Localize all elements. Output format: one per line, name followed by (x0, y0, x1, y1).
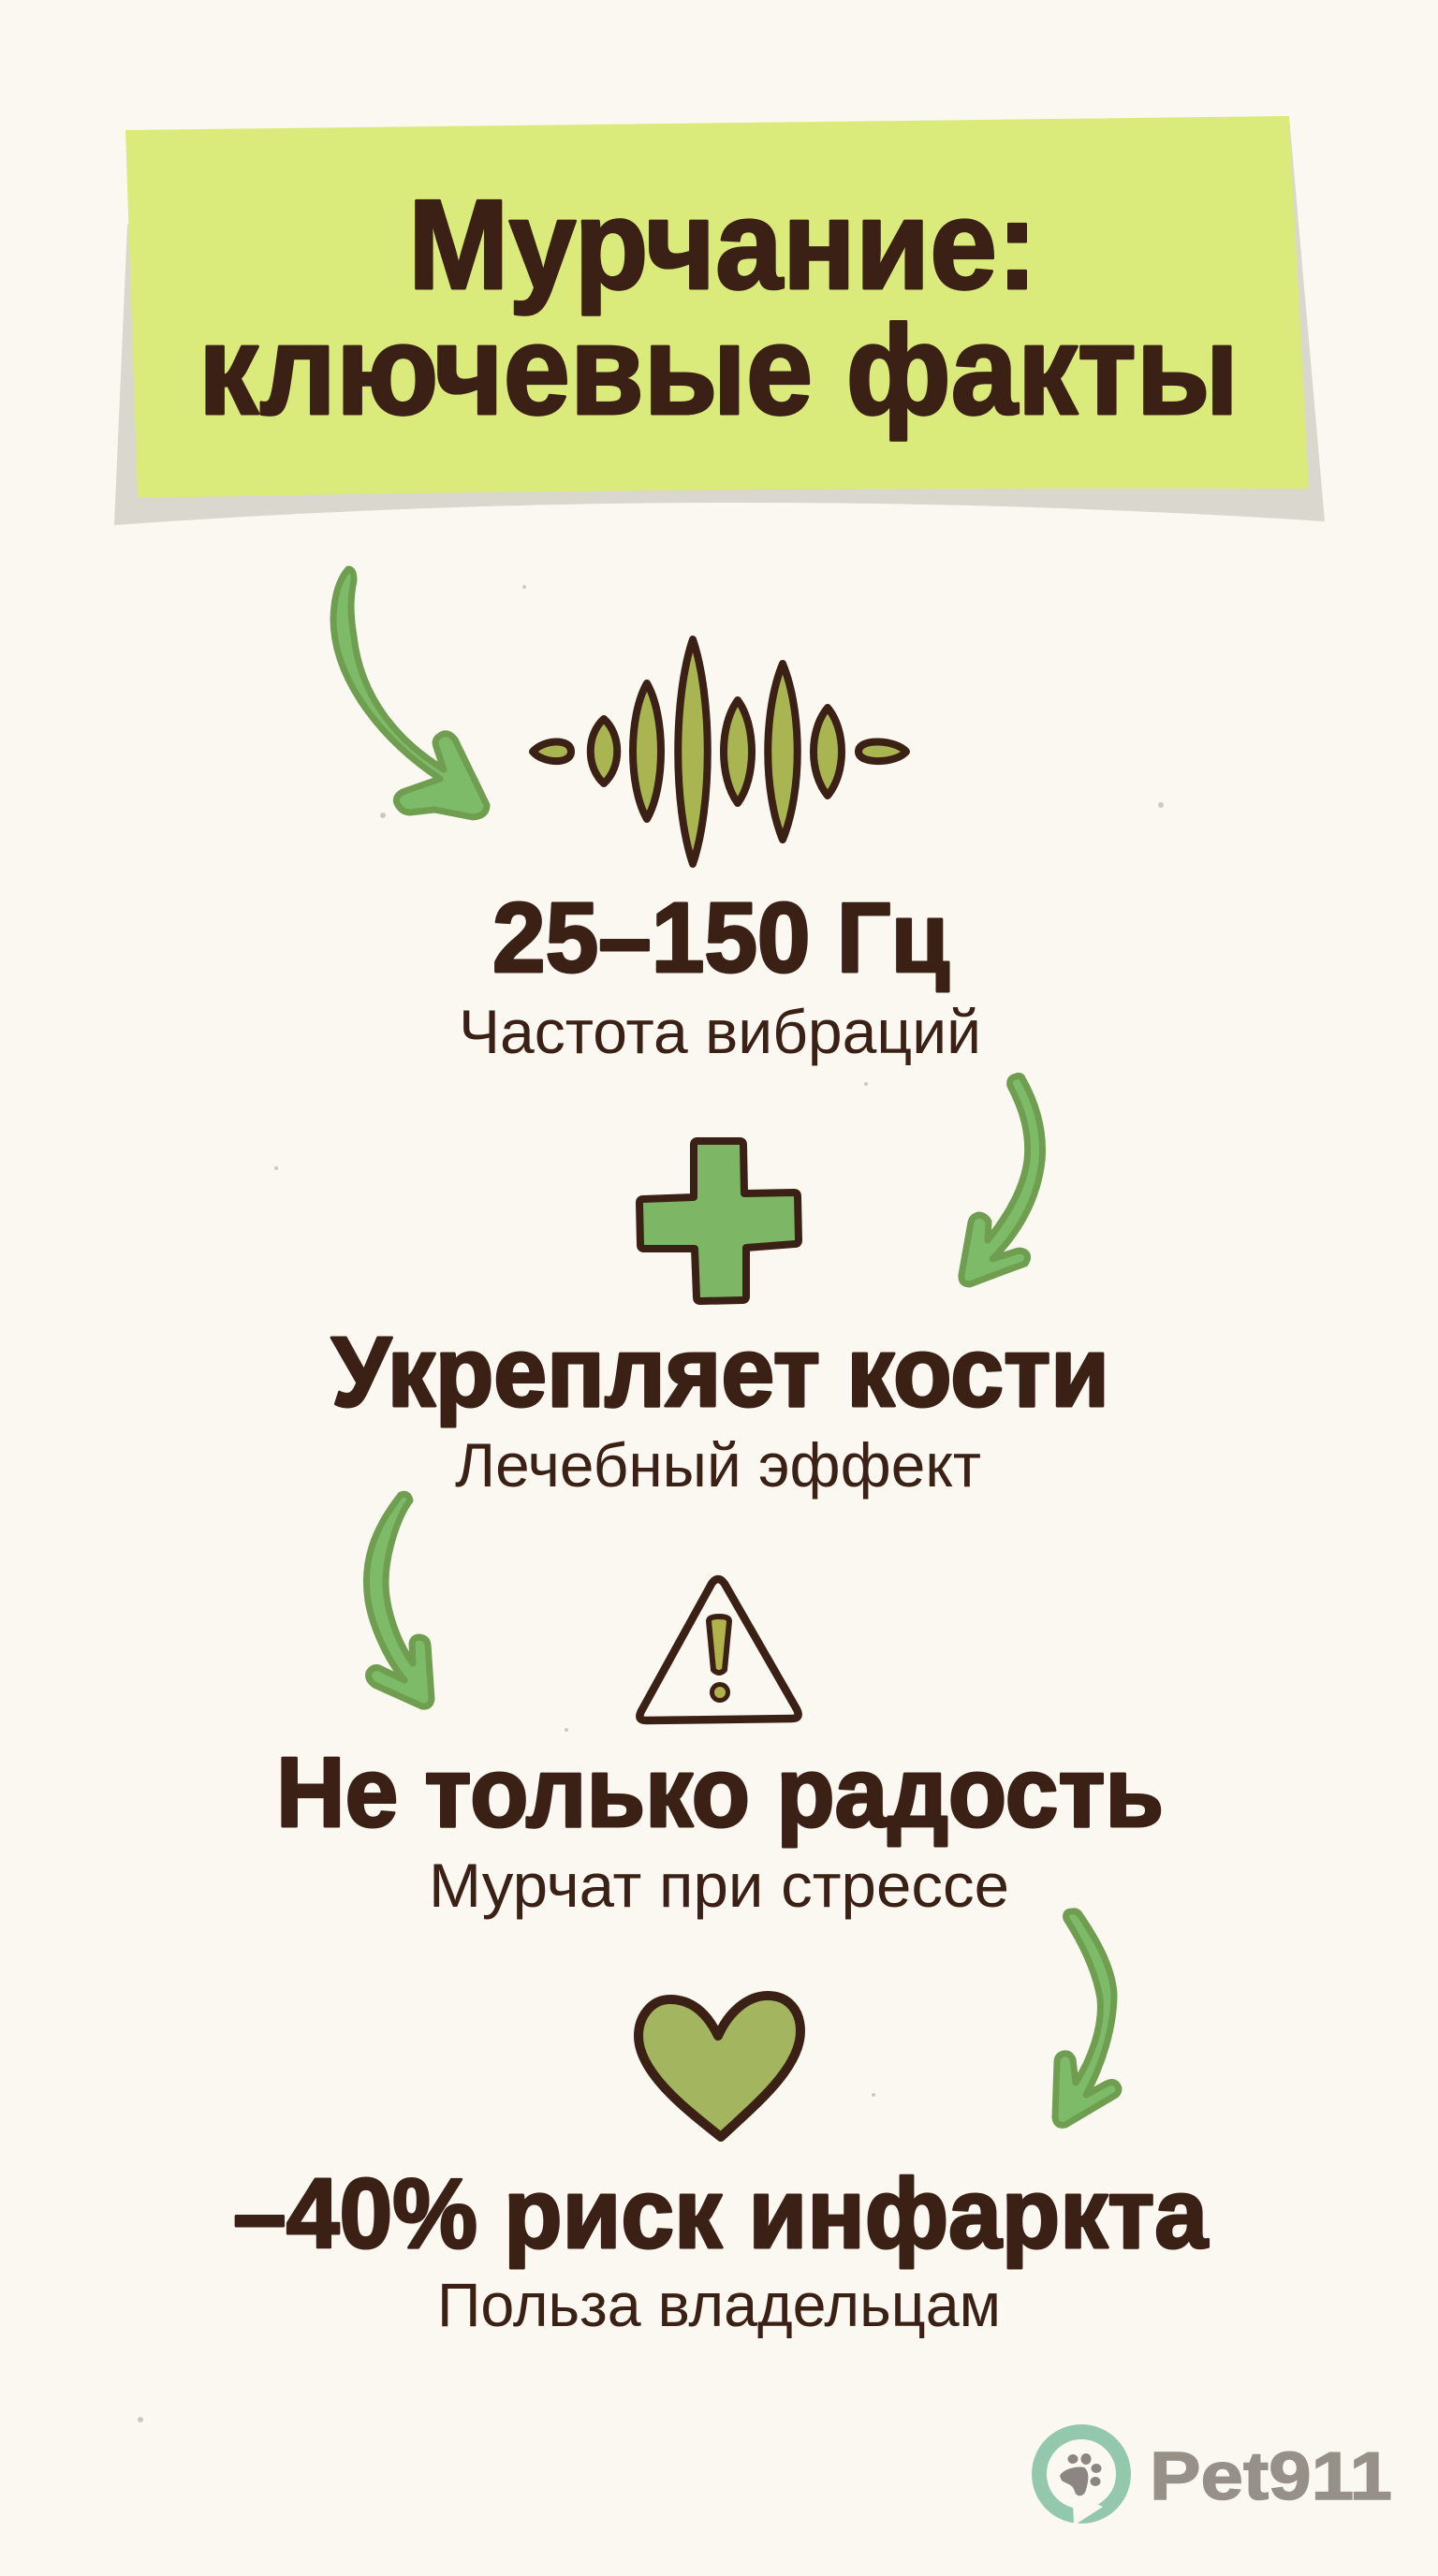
title: Мурчание: (408, 173, 1037, 315)
icon: paw (1060, 2453, 1101, 2496)
arrow 3 (366, 1494, 432, 1706)
icon: heart (638, 1996, 800, 2137)
fact 2 heading: Укрепляет кости (331, 1317, 1109, 1427)
icon: sound wave (533, 639, 906, 864)
arrow 4 (1055, 1911, 1119, 2125)
fact 4 caption: Польза владельцам (437, 2270, 1001, 2339)
logo: Pet911 (1039, 2432, 1392, 2525)
icon: warning triangle (639, 1579, 799, 1720)
fact 4 heading: –40% риск инфаркта (233, 2159, 1209, 2269)
panel sheet (125, 116, 1309, 498)
fact 2 caption: Лечебный эффект (455, 1430, 981, 1500)
title: ключевые факты (198, 299, 1239, 441)
title (198, 173, 1239, 441)
fact 1 heading: 25–150 Гц (492, 883, 949, 993)
arrow 1 (333, 569, 487, 817)
arrow 2 (961, 1076, 1042, 1284)
fact 1 caption: Частота вибраций (459, 997, 981, 1066)
logo ring (1039, 2432, 1123, 2516)
icon: medical cross (639, 1141, 799, 1301)
panel shadow (114, 116, 1325, 525)
fact 3 caption: Мурчат при стрессе (429, 1851, 1009, 1920)
fact 3 heading: Не только радость (276, 1737, 1164, 1848)
title panel (114, 116, 1325, 525)
logo wordmark: Pet911 (1150, 2439, 1392, 2514)
